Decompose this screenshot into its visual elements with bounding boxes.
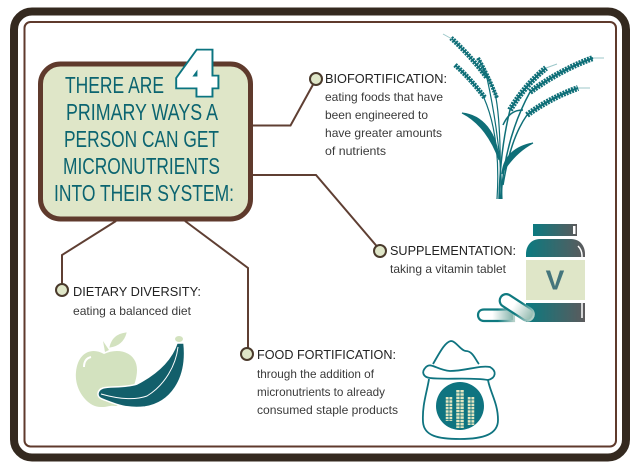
food fortification text [257, 347, 398, 417]
pills [478, 292, 536, 324]
title text: MICRONUTRIENTS [63, 153, 220, 179]
number 4: 4 [179, 41, 215, 106]
title text: PRIMARY WAYS A [66, 99, 219, 125]
label letter V: V [546, 264, 565, 296]
biofortification text: eating foods that have [325, 90, 443, 104]
icon: flour sack [423, 341, 498, 439]
biofortification text: have greater amounts [325, 126, 442, 140]
icon: wheat [443, 34, 604, 199]
dot [241, 348, 253, 360]
title text: PERSON CAN GET [64, 126, 219, 152]
dot [56, 284, 68, 296]
number 4: 4 [179, 41, 215, 106]
biofortification text [325, 71, 447, 158]
biofortification text: been engineered to [325, 108, 428, 122]
dot [374, 245, 386, 257]
biofortification text: of nutrients [325, 144, 386, 158]
circle emblem [436, 382, 484, 430]
food fortification text: micronutrients to already [257, 385, 385, 399]
icon: apple and zucchini [76, 333, 185, 407]
dietary diversity text: eating a balanced diet [73, 304, 192, 318]
title box [40, 41, 250, 219]
food fortification text: consumed staple products [257, 403, 398, 417]
supplementation callout [374, 243, 516, 276]
title text: THERE ARE [65, 72, 164, 98]
icon: vitamin bottle [478, 224, 585, 324]
food fortification callout [241, 347, 398, 417]
connector lines [62, 81, 380, 354]
food fortification text: through the addition of [257, 367, 375, 381]
food fortification text: FOOD FORTIFICATION: [257, 347, 396, 362]
dietary diversity callout [56, 284, 201, 318]
biofortification text: BIOFORTIFICATION: [325, 71, 447, 86]
dietary diversity text [73, 284, 201, 318]
biofortification callout [310, 71, 447, 158]
title text [54, 72, 234, 206]
supplementation text: taking a vitamin tablet [390, 262, 507, 276]
dot [310, 73, 322, 85]
title text: INTO THEIR SYSTEM: [54, 180, 234, 206]
wheat ears in emblem [449, 390, 471, 428]
supplementation text [390, 243, 516, 276]
supplementation text: SUPPLEMENTATION: [390, 243, 516, 258]
dietary diversity text: DIETARY DIVERSITY: [73, 284, 201, 299]
